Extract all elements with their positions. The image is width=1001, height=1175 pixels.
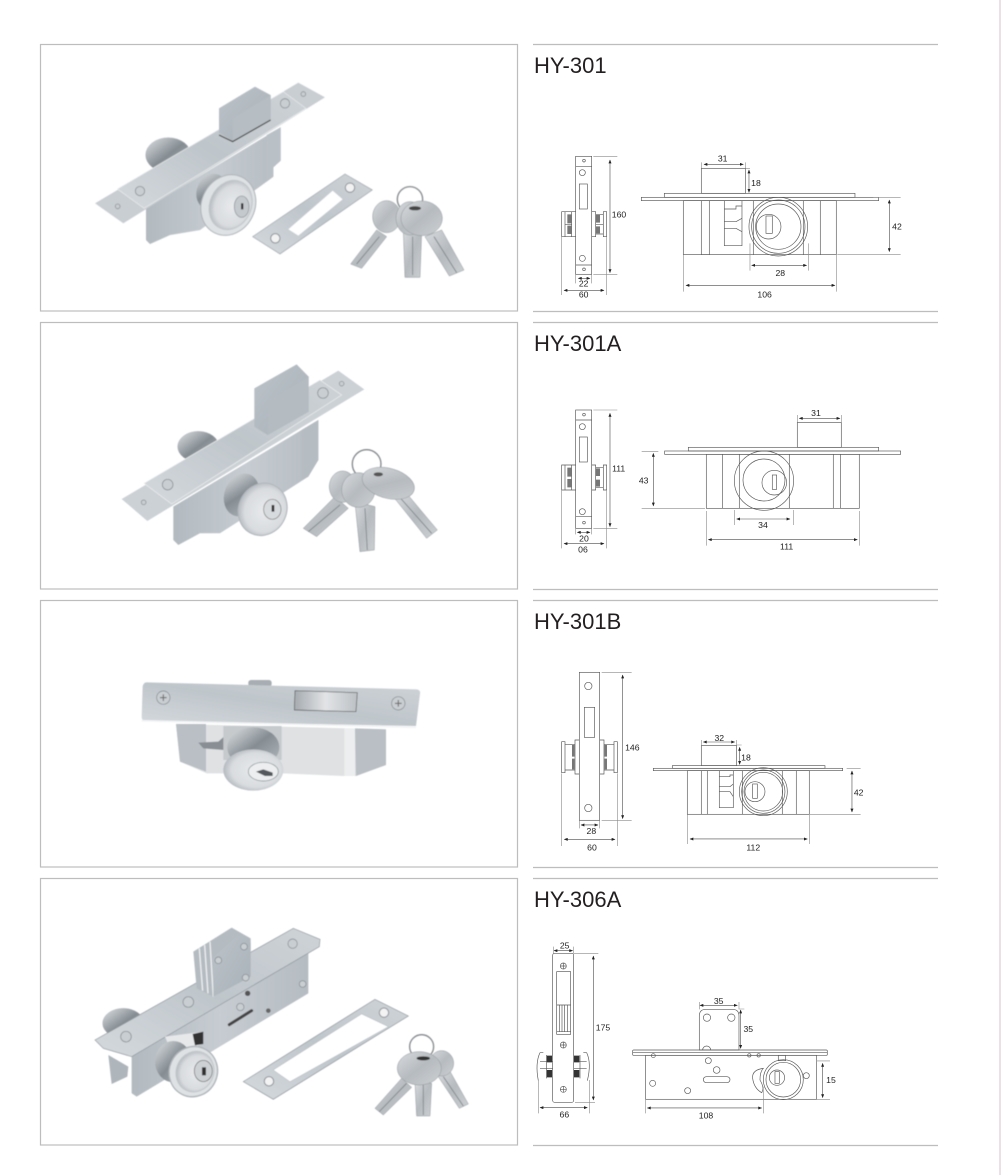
technical drawing: HY-301: 31 bbox=[718, 153, 728, 163]
rule lines bbox=[533, 44, 938, 312]
technical drawing: HY-301: 18 bbox=[751, 178, 761, 188]
technical drawing: HY-301: 42 bbox=[892, 222, 902, 232]
technical drawing: HY-301: 22 bbox=[579, 279, 589, 289]
technical drawing: HY-306A: 35 bbox=[714, 996, 724, 1006]
technical drawing: HY-301B: 112 bbox=[746, 843, 760, 853]
panel: HY-301A product photo bbox=[40, 322, 518, 589]
technical drawing: HY-301B bbox=[562, 672, 864, 853]
technical drawing: HY-301: 60 bbox=[579, 290, 589, 300]
technical drawing: HY-301 bbox=[562, 153, 902, 300]
photo: HY-301A lock and keys bbox=[122, 364, 437, 552]
technical drawing: HY-301A: 06 bbox=[578, 544, 588, 554]
rule lines bbox=[533, 322, 938, 590]
rule lines bbox=[533, 878, 938, 1146]
technical drawing: HY-301A: 111 bbox=[612, 464, 625, 474]
technical drawing: HY-301B: 18 bbox=[741, 753, 751, 763]
technical drawing: HY-301A: 43 bbox=[639, 475, 649, 485]
technical drawing: HY-306A bbox=[537, 941, 836, 1121]
panel: HY-301 product photo bbox=[40, 44, 518, 311]
technical drawing: HY-301: 160 bbox=[612, 210, 626, 220]
technical drawing: HY-306A: 108 bbox=[699, 1111, 713, 1121]
technical drawing: HY-306A: 66 bbox=[560, 1109, 569, 1119]
technical drawing: HY-306A: 15 bbox=[826, 1075, 836, 1085]
technical drawing: HY-301B: 146 bbox=[625, 743, 640, 753]
technical drawing: HY-301A: 31 bbox=[811, 408, 821, 418]
technical drawing: HY-301A bbox=[562, 408, 901, 554]
right edge line bbox=[999, 0, 1001, 1175]
photo: HY-301B lock bbox=[142, 680, 420, 791]
heading: HY-301: HY-301 bbox=[534, 53, 607, 78]
technical drawing: HY-306A: 35 bbox=[743, 1024, 753, 1034]
heading: HY-306A: HY-306A bbox=[534, 887, 622, 912]
panel: HY-301A drawing bbox=[533, 322, 938, 590]
panel: HY-306A drawing bbox=[533, 878, 938, 1146]
panel: HY-301B product photo bbox=[40, 600, 518, 867]
heading: HY-301B: HY-301B bbox=[534, 609, 621, 634]
photo: HY-306A lock and keys bbox=[95, 928, 468, 1116]
technical drawing: HY-301B: 32 bbox=[714, 733, 724, 743]
technical drawing: HY-301: 28 bbox=[775, 268, 785, 278]
technical drawing: HY-306A: 25 bbox=[560, 941, 570, 951]
panel: HY-301B drawing bbox=[533, 600, 938, 868]
panel: HY-306A product photo bbox=[40, 878, 518, 1145]
technical drawing: HY-301: 106 bbox=[757, 290, 772, 300]
rule lines bbox=[533, 600, 938, 868]
heading: HY-301A: HY-301A bbox=[534, 331, 622, 356]
panel: HY-301 drawing bbox=[533, 44, 938, 312]
technical drawing: HY-301B: 28 bbox=[587, 826, 596, 836]
technical drawing: HY-301B: 60 bbox=[587, 842, 597, 852]
technical drawing: HY-306A: 175 bbox=[596, 1023, 610, 1033]
technical drawing: HY-301A: 20 bbox=[579, 533, 589, 543]
technical drawing: HY-301B: 42 bbox=[854, 788, 864, 798]
technical drawing: HY-301A: 111 bbox=[780, 542, 793, 552]
photo: HY-301 lock and keys bbox=[95, 83, 464, 277]
technical drawing: HY-301A: 34 bbox=[758, 520, 768, 530]
